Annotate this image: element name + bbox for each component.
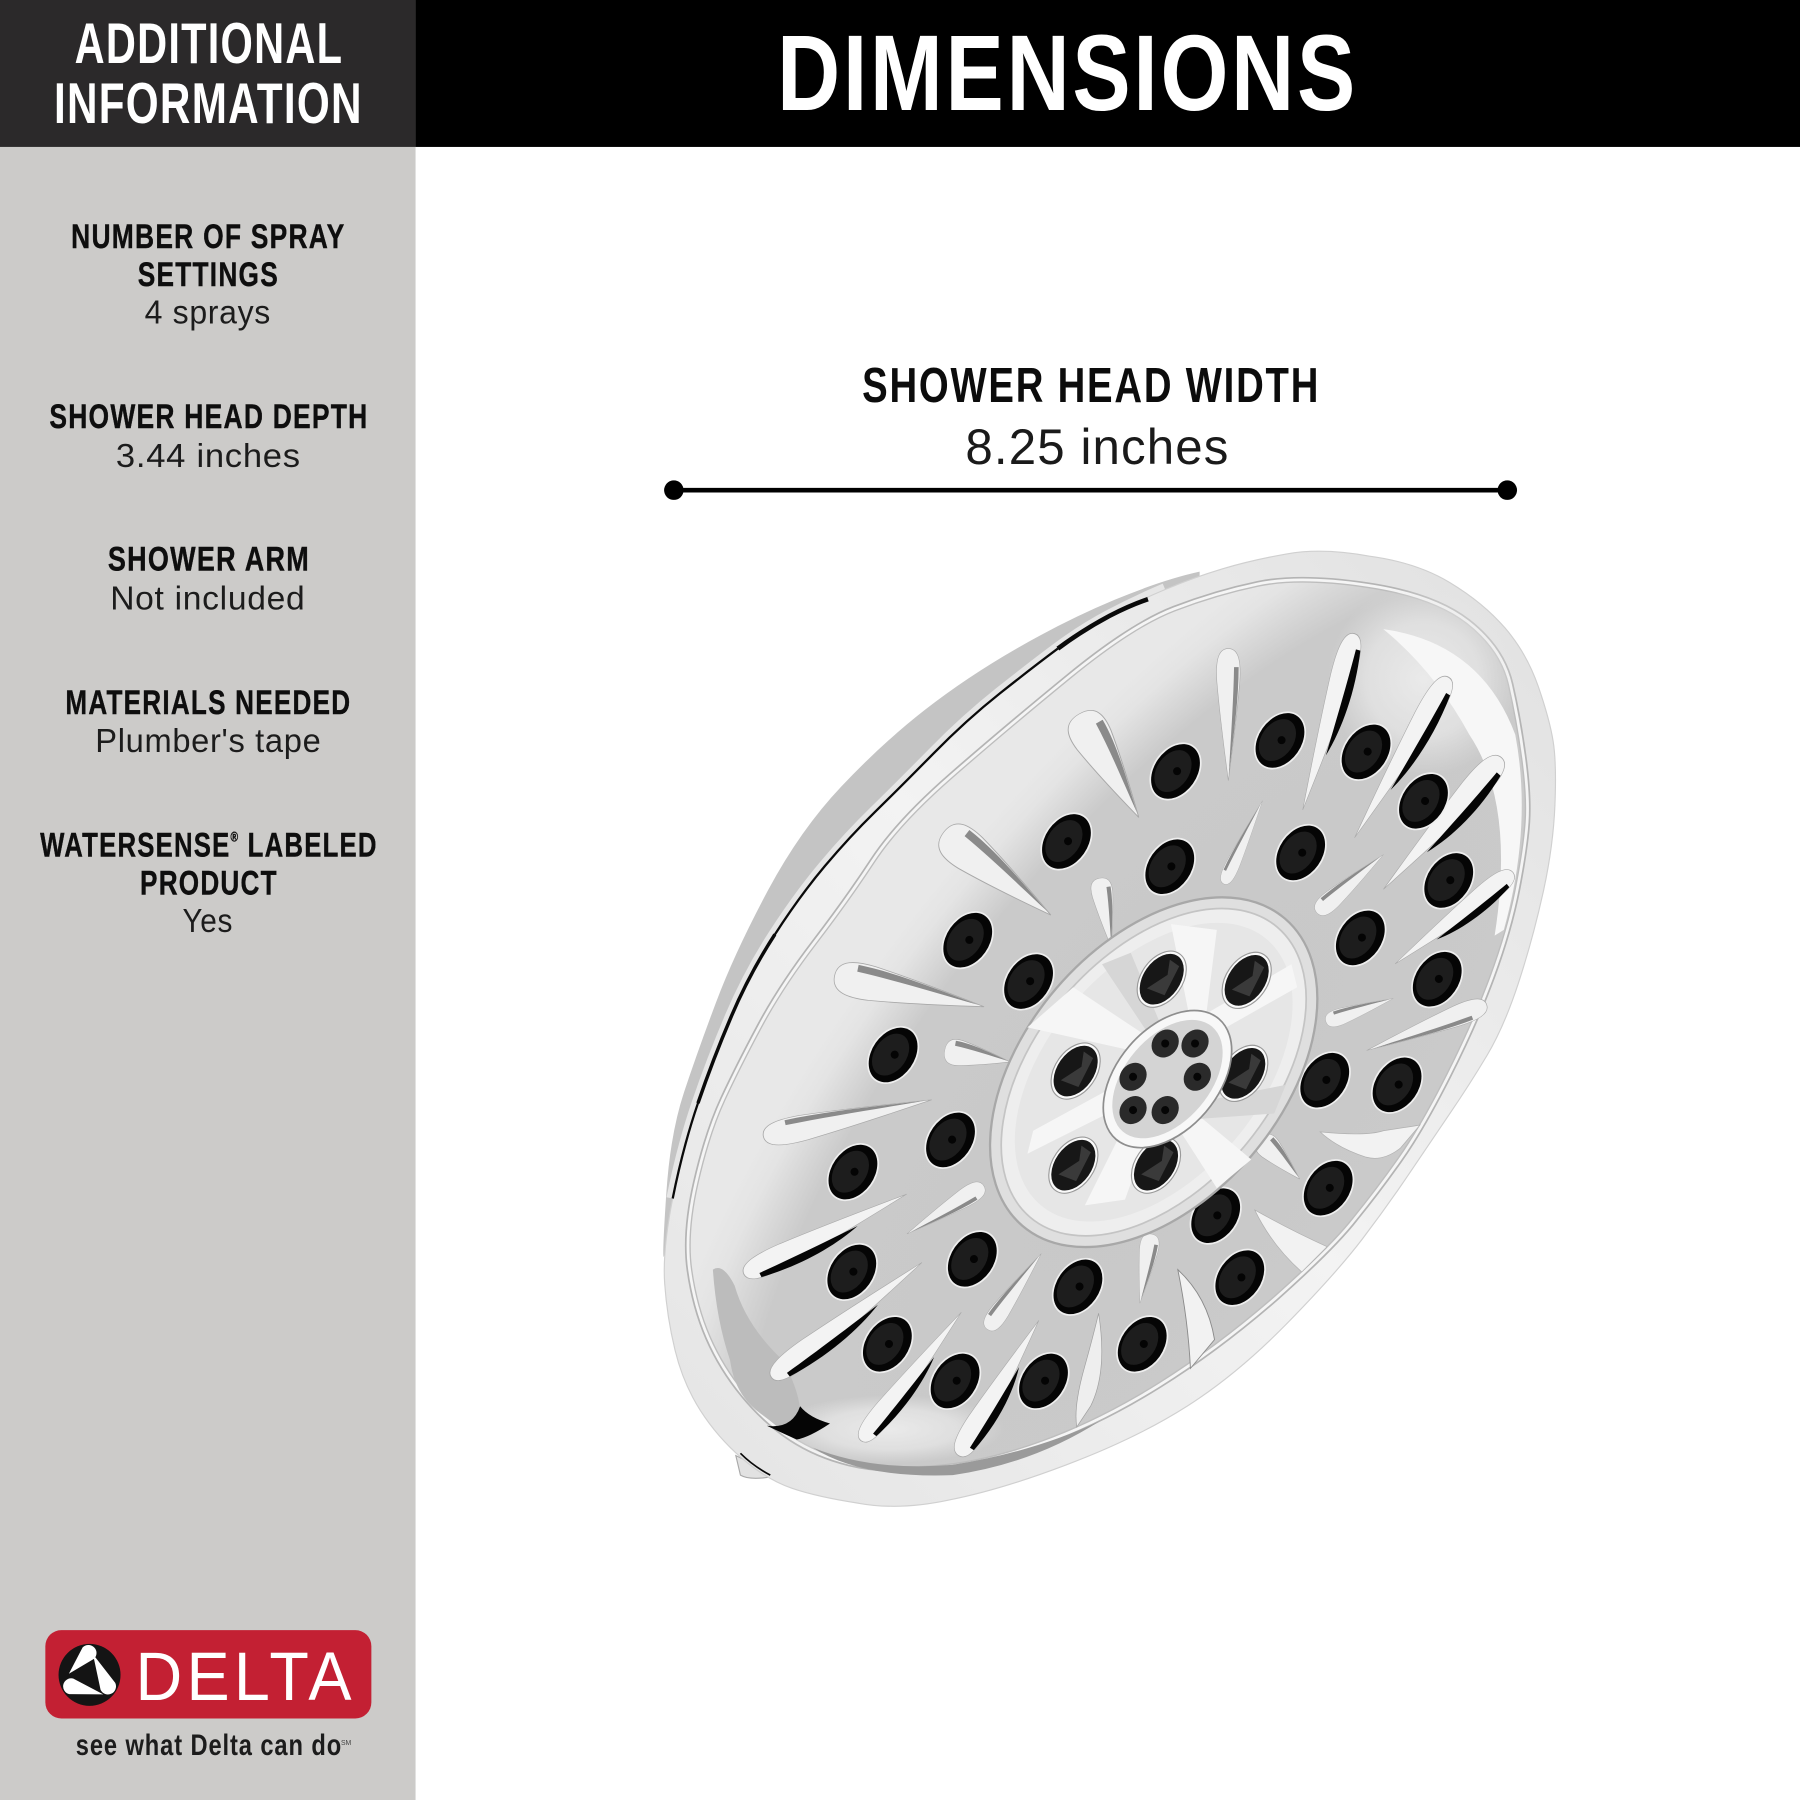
radial fins [739,630,1521,1463]
spec: watersense: LABELED [239,826,378,864]
sidebar header: ADDITIONAL [75,12,343,76]
spec: watersense [40,826,378,940]
main header: dimensions [416,0,1800,147]
rear shell [663,572,1200,1257]
spec: number of spray settings: NUMBER OF SPRAY [71,218,346,256]
spray switch nub [736,1456,785,1478]
chrome glints [713,583,1522,1475]
spec: watersense: PRODUCT [140,864,278,902]
spec: materials needed: MATERIALS NEEDED [65,684,351,722]
Delta logo: DELTA [135,1638,356,1715]
main header: dimensions: DIMENSIONS [777,12,1358,133]
icon: Delta emblem [59,1644,121,1706]
front rim [664,551,1555,1506]
spec: number of spray settings [71,218,346,332]
spec: shower head depth: 3.44 inches [116,438,301,475]
shower head illustration [663,551,1555,1506]
spec: number of spray settings: 4 sprays [145,295,271,332]
outer and middle spray nozzles [815,701,1486,1420]
heading: shower head width: SHOWER HEAD WIDTH [862,358,1320,413]
sidebar header: INFORMATION [54,72,363,136]
heading: shower head width: 8.25 inches [965,418,1229,475]
Delta logo: see what Delta can do [76,1729,342,1762]
spec: shower arm: SHOWER ARM [108,541,310,579]
spec: shower arm [108,541,310,618]
width dimension line [664,480,1517,500]
sidebar header [0,0,416,147]
Delta logo: SM [341,1740,352,1747]
centre hub [925,835,1383,1309]
spec: watersense: WATERSENSE [40,826,295,864]
spec: watersense: ® [231,829,239,844]
rim edge shadow line [673,599,1148,1475]
spec: watersense: Yes [183,903,233,940]
spec: materials needed: Plumber's tape [95,723,321,760]
spec: shower head depth: SHOWER HEAD DEPTH [49,398,368,436]
spray face [690,582,1525,1467]
spec: materials needed [65,684,351,760]
spec: number of spray settings: SETTINGS [138,256,279,294]
sidebar panel [0,0,416,1800]
centre cap with small nozzles [1078,986,1257,1172]
rear shell highlight [673,589,1165,1198]
Delta logo [45,1630,371,1762]
spec: shower arm: Not included [110,581,305,618]
spec: shower head depth [49,398,368,475]
heading: shower head width [862,358,1320,475]
